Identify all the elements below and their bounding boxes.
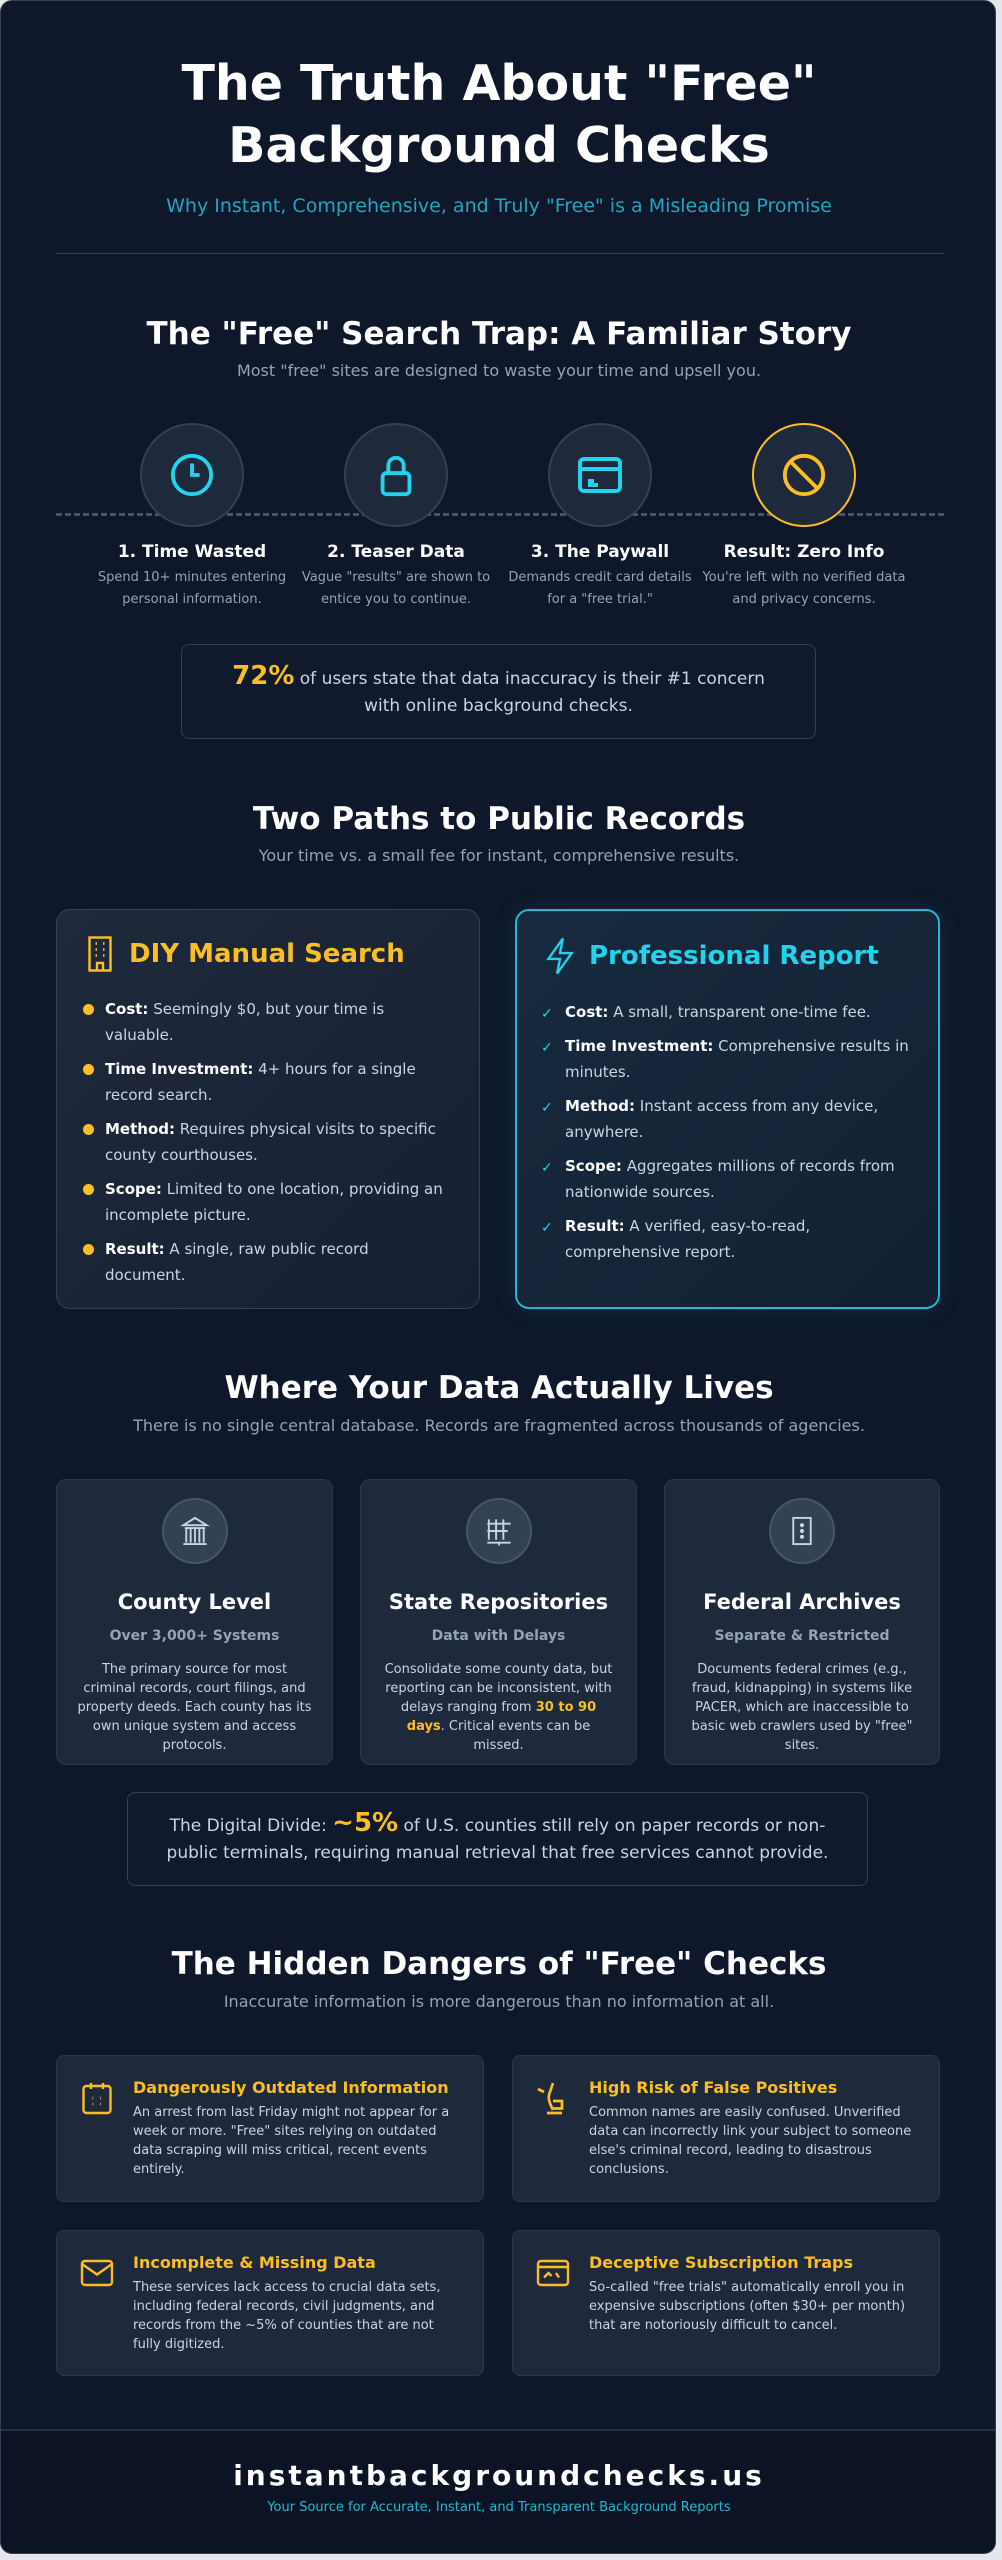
- footer tagline: Your Source for Accurate, Instant, and Transparent Background Reports: [267, 2500, 731, 2515]
- step 3: 3. The Paywall: [531, 542, 669, 562]
- card: county level: Over 3,000+ Systems: [110, 1628, 279, 1644]
- callout: digital divide: The Digital Divide: ~5% of U.S. counties still rely on paper records or non-public terminals, requiring manual retrieval that free services cannot provide.: [167, 1808, 828, 1863]
- heading: free search trap: The "Free" Search Trap: A Familiar Story: [147, 316, 851, 352]
- title: [181, 55, 817, 174]
- card: outdated info: Dangerously Outdated Information: [133, 2078, 449, 2097]
- step 2: Vague "results" are shown to entice you to continue.: [302, 570, 490, 607]
- icon: alert figure: [537, 2082, 564, 2114]
- callout: 72% stat: 72% of users state that data inaccuracy is their #1 concern with online background checks.: [232, 661, 765, 716]
- heading: where data lives: Where Your Data Actually Lives: [224, 1370, 774, 1406]
- step 3: [508, 542, 692, 607]
- title: The Truth About "Free": [181, 55, 817, 112]
- heading: hidden dangers: The Hidden Dangers of "Free" Checks: [172, 1946, 826, 1982]
- callout: 72% stat: [181, 644, 816, 739]
- panel: professional report: Scope: Aggregates millions of records from nationwide sources.: [565, 1157, 895, 1201]
- panel: DIY manual search: Scope: Limited to one location, providing an incomplete picture.: [105, 1180, 443, 1224]
- card: outdated info: An arrest from last Friday might not appear for a week or more. "Free" sites relying on outdated data scraping will miss critical, recent events entirely.: [133, 2105, 449, 2177]
- card: state repositories: Consolidate some county data, but reporting can be inconsistent, with delays ranging from 30 to 90 days. Critical events can be missed.: [385, 1662, 612, 1753]
- icon: lock: [344, 423, 448, 527]
- icon: credit card: [548, 423, 652, 527]
- card: county level: [56, 1479, 333, 1765]
- card: state repositories: Data with Delays: [432, 1628, 565, 1644]
- panel: DIY manual search: [56, 909, 480, 1309]
- panel: professional report: Time Investment: Comprehensive results in minutes.: [565, 1037, 909, 1081]
- subheading: trap: Most "free" sites are designed to waste your time and upsell you.: [237, 361, 761, 380]
- panel: professional report: Method: Instant access from any device, anywhere.: [565, 1097, 878, 1141]
- step 1: Spend 10+ minutes entering personal information.: [98, 570, 286, 607]
- heading: professional: Professional Report: [589, 941, 879, 971]
- step 1: [98, 542, 286, 607]
- step 4: You're left with no verified data and privacy concerns.: [703, 570, 905, 607]
- card: federal archives: Federal Archives: [703, 1590, 901, 1614]
- subtitle: Why Instant, Comprehensive, and Truly "Free" is a Misleading Promise: [166, 195, 832, 217]
- card: subscription traps: So-called "free trials" automatically enroll you in expensive subscriptions (often $30+ per month) that are notoriously difficult to cancel.: [589, 2280, 905, 2333]
- card: federal archives: Documents federal crimes (e.g., fraud, kidnapping) in systems like PACER, which are inaccessible to basic web crawlers used by "free" sites.: [692, 1662, 912, 1753]
- panel: professional report: Result: A verified, easy-to-read, comprehensive report.: [565, 1217, 810, 1261]
- subheading: data: There is no single central database. Records are fragmented across thousands of agencies.: [133, 1416, 865, 1435]
- card: subscription traps: [512, 2230, 940, 2376]
- step 4: [702, 542, 905, 607]
- panel: DIY manual search: Cost: Seemingly $0, but your time is valuable.: [105, 1000, 384, 1044]
- card: false positives: Common names are easily confused. Unverified data can incorrectly link your subject to someone else's criminal record, leading to disastrous conclusions.: [589, 2105, 911, 2177]
- title: Background Checks: [228, 117, 770, 174]
- icon: prohibited: [752, 423, 856, 527]
- card: incomplete data: [56, 2230, 484, 2376]
- callout: digital divide: [127, 1792, 868, 1886]
- icon: calendar: [82, 2083, 112, 2114]
- heading: DIY: DIY Manual Search: [129, 939, 405, 969]
- step 1: 1. Time Wasted: [118, 542, 266, 562]
- footer: [1, 2429, 997, 2555]
- step 2: 2. Teaser Data: [327, 542, 465, 562]
- footer domain: instantbackgroundchecks.us: [233, 2459, 765, 2492]
- panel: professional report: Cost: A small, transparent one-time fee.: [565, 1003, 871, 1021]
- card: outdated info: [56, 2055, 484, 2202]
- step 4: Result: Zero Info: [724, 542, 884, 562]
- icon: card trap: [536, 2260, 570, 2286]
- card: federal archives: [664, 1479, 940, 1765]
- panel: DIY manual search: Result: A single, raw public record document.: [105, 1240, 369, 1284]
- panel: DIY manual search: Time Investment: 4+ hours for a single record search.: [105, 1060, 416, 1104]
- card: county level: The primary source for most criminal records, court filings, and property deeds. Each county has its own unique system and access protocols.: [77, 1662, 312, 1753]
- panel: professional report: [515, 909, 940, 1309]
- subheading: dangers: Inaccurate information is more dangerous than no information at all.: [224, 1992, 774, 2011]
- step 2: [302, 542, 490, 607]
- icon: envelope: [80, 2260, 114, 2286]
- card: false positives: High Risk of False Positives: [589, 2078, 837, 2097]
- icon: clock: [140, 423, 244, 527]
- card: state repositories: State Repositories: [389, 1590, 608, 1614]
- card: incomplete data: Incomplete & Missing Data: [133, 2253, 376, 2272]
- card: federal archives: Separate & Restricted: [714, 1628, 890, 1644]
- card: subscription traps: Deceptive Subscription Traps: [589, 2253, 853, 2272]
- card: state repositories: [360, 1479, 637, 1765]
- card: county level: County Level: [118, 1590, 271, 1614]
- card: incomplete data: These services lack access to crucial data sets, including federal records, civil judgments, and records from the ~5% of counties that are not fully digitized.: [133, 2280, 440, 2352]
- step 3: Demands credit card details for a "free trial.": [508, 570, 692, 607]
- card: false positives: [512, 2055, 940, 2202]
- subheading: two paths: Your time vs. a small fee for instant, comprehensive results.: [259, 846, 739, 865]
- heading: two paths: Two Paths to Public Records: [253, 801, 745, 837]
- panel: DIY manual search: Method: Requires physical visits to specific county courthouses.: [105, 1120, 436, 1164]
